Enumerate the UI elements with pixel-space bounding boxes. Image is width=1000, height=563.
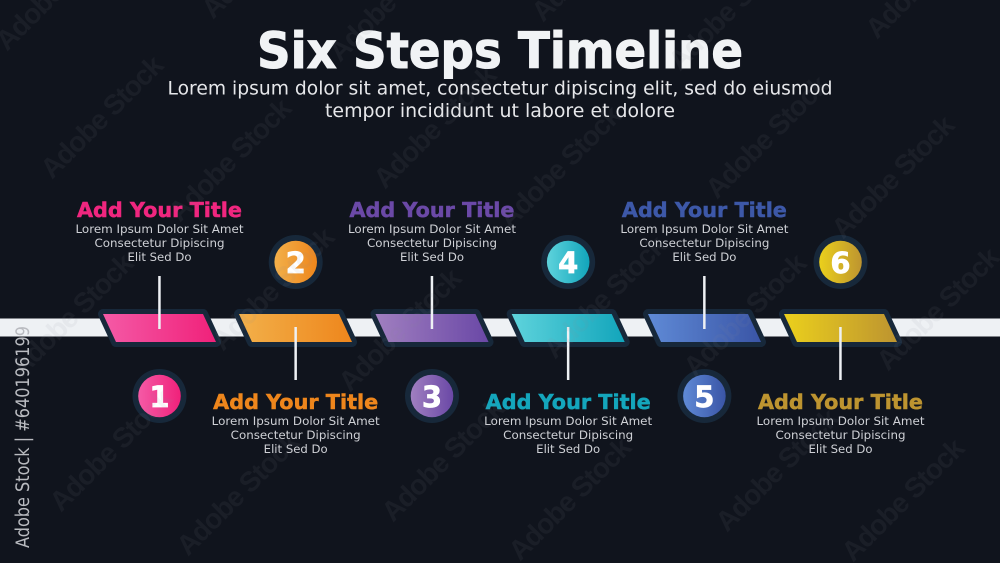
step 6 — [756, 235, 925, 456]
step 1 badge: 1 — [149, 380, 170, 414]
timeline band — [0, 318, 1000, 336]
step 5 connector — [703, 276, 706, 329]
step 5 segment — [648, 314, 761, 342]
watermark pattern: Adobe Stock — [367, 59, 503, 194]
step 3 badge — [405, 369, 459, 423]
step 2 text: Lorem Ipsum Dolor Sit Amet — [212, 414, 380, 428]
step 3 heading: Add Your Title — [350, 198, 514, 222]
step 2 text — [212, 414, 380, 456]
step 6 text: Consectetur Dipiscing — [776, 428, 906, 442]
step 1 segment — [103, 314, 216, 342]
watermark pattern: Adobe Stock — [699, 69, 835, 204]
step 1 text: Consectetur Dipiscing — [94, 236, 224, 250]
step 3 badge: 3 — [422, 380, 442, 414]
watermark pattern: Adobe Stock — [502, 431, 638, 563]
step 6 text: Lorem Ipsum Dolor Sit Amet — [756, 414, 925, 428]
watermark pattern: Adobe Stock — [537, 229, 673, 364]
step 2 text: Consectetur Dipiscing — [231, 428, 361, 442]
stock id watermark: Adobe Stock | #640196199 — [13, 326, 34, 548]
step 2 badge — [269, 235, 323, 289]
watermark pattern: Adobe Stock — [4, 247, 140, 382]
step 3 — [348, 198, 516, 423]
step 4 — [484, 235, 653, 456]
step 6 heading: Add Your Title — [758, 390, 923, 414]
step 6 badge: 6 — [830, 246, 851, 280]
step 5 text: Consectetur Dipiscing — [639, 236, 769, 250]
step 5 text — [620, 222, 789, 264]
subtitle: Lorem ipsum dolor sit amet, consectetur dipiscing elit, sed do eiusmod — [168, 78, 832, 100]
watermark pattern: Adobe Stock — [375, 392, 511, 527]
step 3 connector — [431, 276, 433, 329]
title: Six Steps Timeline — [257, 22, 743, 80]
watermark pattern: Adobe Stock — [332, 262, 468, 397]
step 1 heading: Add Your Title — [77, 198, 242, 222]
step 3 text — [348, 222, 516, 264]
step 2 segment — [239, 314, 352, 342]
step 2 connector — [294, 327, 297, 380]
step 3 segment — [376, 314, 488, 342]
step 1 badge — [132, 369, 186, 423]
step 6 segment — [784, 314, 897, 342]
step 5 badge: 5 — [694, 380, 714, 414]
step 1 — [76, 198, 244, 423]
step 5 text: Elit Sed Do — [672, 250, 736, 264]
step 6 badge — [814, 235, 868, 289]
step 1 text — [76, 222, 244, 264]
step 2 text: Elit Sed Do — [264, 442, 328, 456]
step 2 — [212, 235, 380, 456]
step 4 badge: 4 — [558, 246, 578, 280]
step 5 text: Lorem Ipsum Dolor Sit Amet — [620, 222, 789, 236]
step 3 text: Elit Sed Do — [400, 250, 464, 264]
watermark pattern: Adobe Stock — [162, 92, 298, 227]
step 1 text: Elit Sed Do — [128, 250, 192, 264]
watermark pattern: Adobe Stock — [677, 247, 813, 382]
step 5 badge — [677, 369, 731, 423]
step 2 badge: 2 — [286, 246, 306, 280]
step 6 text — [756, 414, 925, 456]
step 4 text — [484, 414, 653, 456]
subtitle — [168, 78, 832, 122]
watermark pattern: Adobe Stock — [43, 382, 179, 517]
watermark pattern: Adobe Stock — [825, 109, 961, 244]
step 4 segment — [512, 314, 625, 342]
watermark pattern: Adobe Stock — [205, 221, 341, 356]
step 4 text: Elit Sed Do — [536, 442, 600, 456]
step 4 text: Lorem Ipsum Dolor Sit Amet — [484, 414, 653, 428]
step 3 text: Consectetur Dipiscing — [367, 236, 497, 250]
watermark pattern: Adobe Stock — [492, 99, 628, 234]
watermark pattern: Adobe Stock — [34, 49, 170, 184]
step 5 heading: Add Your Title — [622, 198, 787, 222]
watermark pattern: Adobe Stock — [709, 402, 845, 537]
step 1 text: Lorem Ipsum Dolor Sit Amet — [76, 222, 244, 236]
step 2 heading: Add Your Title — [213, 390, 378, 414]
step 1 connector — [158, 276, 161, 329]
subtitle: tempor incididunt ut labore et dolore — [325, 100, 675, 122]
step 4 heading: Add Your Title — [486, 390, 651, 414]
step 6 text: Elit Sed Do — [808, 442, 872, 456]
step 4 text: Consectetur Dipiscing — [503, 428, 633, 442]
step 5 — [620, 198, 789, 423]
step 3 text: Lorem Ipsum Dolor Sit Amet — [348, 222, 516, 236]
step 4 badge — [541, 235, 595, 289]
watermark pattern: Adobe Stock — [170, 426, 306, 561]
step 4 connector — [567, 327, 569, 380]
step 6 connector — [839, 327, 842, 380]
